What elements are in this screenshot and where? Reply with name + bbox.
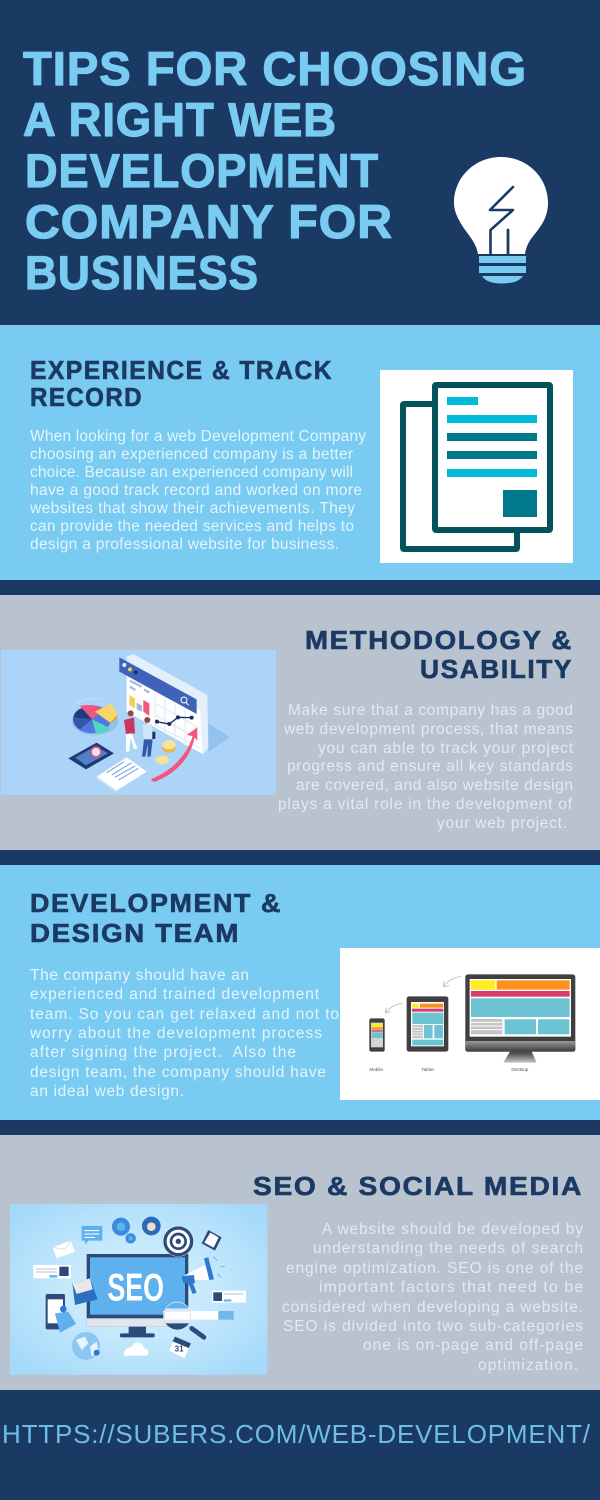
text block: experience: have a good track record and worked on more (30, 482, 362, 499)
text block: experience: can provide the needed services and helps to (30, 518, 354, 535)
text block: seo: A website should be developed by (322, 1221, 583, 1238)
heading: methodology (305, 627, 573, 684)
heading: experience (30, 357, 333, 412)
text block: development: experienced and trained development (30, 986, 320, 1003)
icon: documents (380, 370, 573, 563)
title: DEVELOPMENT (25, 145, 379, 198)
illustration: seo monitor: 31 (175, 1345, 184, 1354)
text block: seo: one is on-page and off-page (363, 1337, 583, 1354)
title: A RIGHT WEB (23, 94, 337, 147)
text block: development: team. So you can get relaxed and not to (30, 1006, 339, 1023)
text block: seo: considered when developing a website. (282, 1299, 583, 1316)
text block: development: design team, the company should have (30, 1064, 326, 1081)
text block: methodology (278, 702, 574, 832)
text block: methodology: web development process, that means (283, 721, 573, 738)
text block: seo (282, 1221, 583, 1374)
panel: seo and social media (0, 1135, 600, 1390)
icon: light bulb (454, 157, 548, 284)
text block: methodology: your web project. (437, 815, 567, 832)
heading: methodology: METHODOLOGY & (305, 627, 573, 655)
panel: header (0, 0, 600, 325)
text block: methodology: you can able to track your project (318, 740, 574, 757)
title: COMPANY FOR (25, 196, 393, 249)
text block: experience: websites that show their achievements. They (29, 500, 355, 517)
panel: development and design team (0, 865, 600, 1120)
text block: methodology: are covered, and also website design (296, 777, 573, 794)
text block: development: after signing the project. Also the (30, 1044, 296, 1061)
panel: experience and track record (0, 325, 600, 580)
text block: seo: understanding the needs of search (313, 1240, 583, 1257)
title: BUSINESS (25, 247, 259, 300)
text block: experience: When looking for a web Development Company (30, 428, 366, 445)
illustration: responsive devices: Mobile (369, 1067, 383, 1072)
heading: development: DEVELOPMENT & (30, 890, 282, 918)
text block: seo: important factors that need to be (319, 1279, 583, 1296)
text block: experience: choosing an experienced company is a better (30, 446, 353, 463)
panel: methodology and usability (0, 595, 600, 850)
text block: seo: SEO is divided into two sub-categories (283, 1318, 583, 1335)
text block: seo: engine optimization. SEO is one of the (286, 1260, 583, 1277)
illustration: responsive devices: Tablet (421, 1067, 434, 1072)
text block: development: The company should have an (30, 967, 249, 984)
illustration: analytics board (1, 650, 276, 795)
text block: development: an ideal web design. (30, 1083, 184, 1100)
text block: experience: design a professional website for business. (30, 536, 339, 553)
text block: methodology: plays a vital role in the development of (278, 796, 573, 813)
illustration: seo monitor (10, 1204, 267, 1375)
illustration: responsive devices (340, 948, 600, 1100)
heading: experience: EXPERIENCE & TRACK (30, 357, 333, 385)
heading: development (30, 890, 282, 948)
text block: seo: optimization. (478, 1357, 578, 1374)
text block: development (29, 967, 339, 1100)
heading: development: DESIGN TEAM (30, 920, 240, 948)
illustration: seo monitor: SEO (107, 1266, 164, 1310)
heading: methodology: USABILITY (420, 656, 573, 684)
text block: methodology: Make sure that a company has a good (288, 702, 573, 719)
heading: seo: SEO & SOCIAL MEDIA (253, 1173, 583, 1201)
heading: experience: RECORD (30, 384, 143, 412)
footer url: HTTPS://SUBERS.COM/WEB-DEVELOPMENT/ (2, 1419, 591, 1449)
title (23, 43, 527, 300)
text block: experience (29, 428, 366, 553)
illustration: responsive devices: Desktop (511, 1067, 529, 1072)
text block: development: worry about the development process (29, 1025, 322, 1042)
text block: methodology: progress and ensure all key standards (287, 758, 573, 775)
text block: experience: choice. Because an experienced company will (30, 464, 353, 481)
title: TIPS FOR CHOOSING (23, 43, 527, 96)
